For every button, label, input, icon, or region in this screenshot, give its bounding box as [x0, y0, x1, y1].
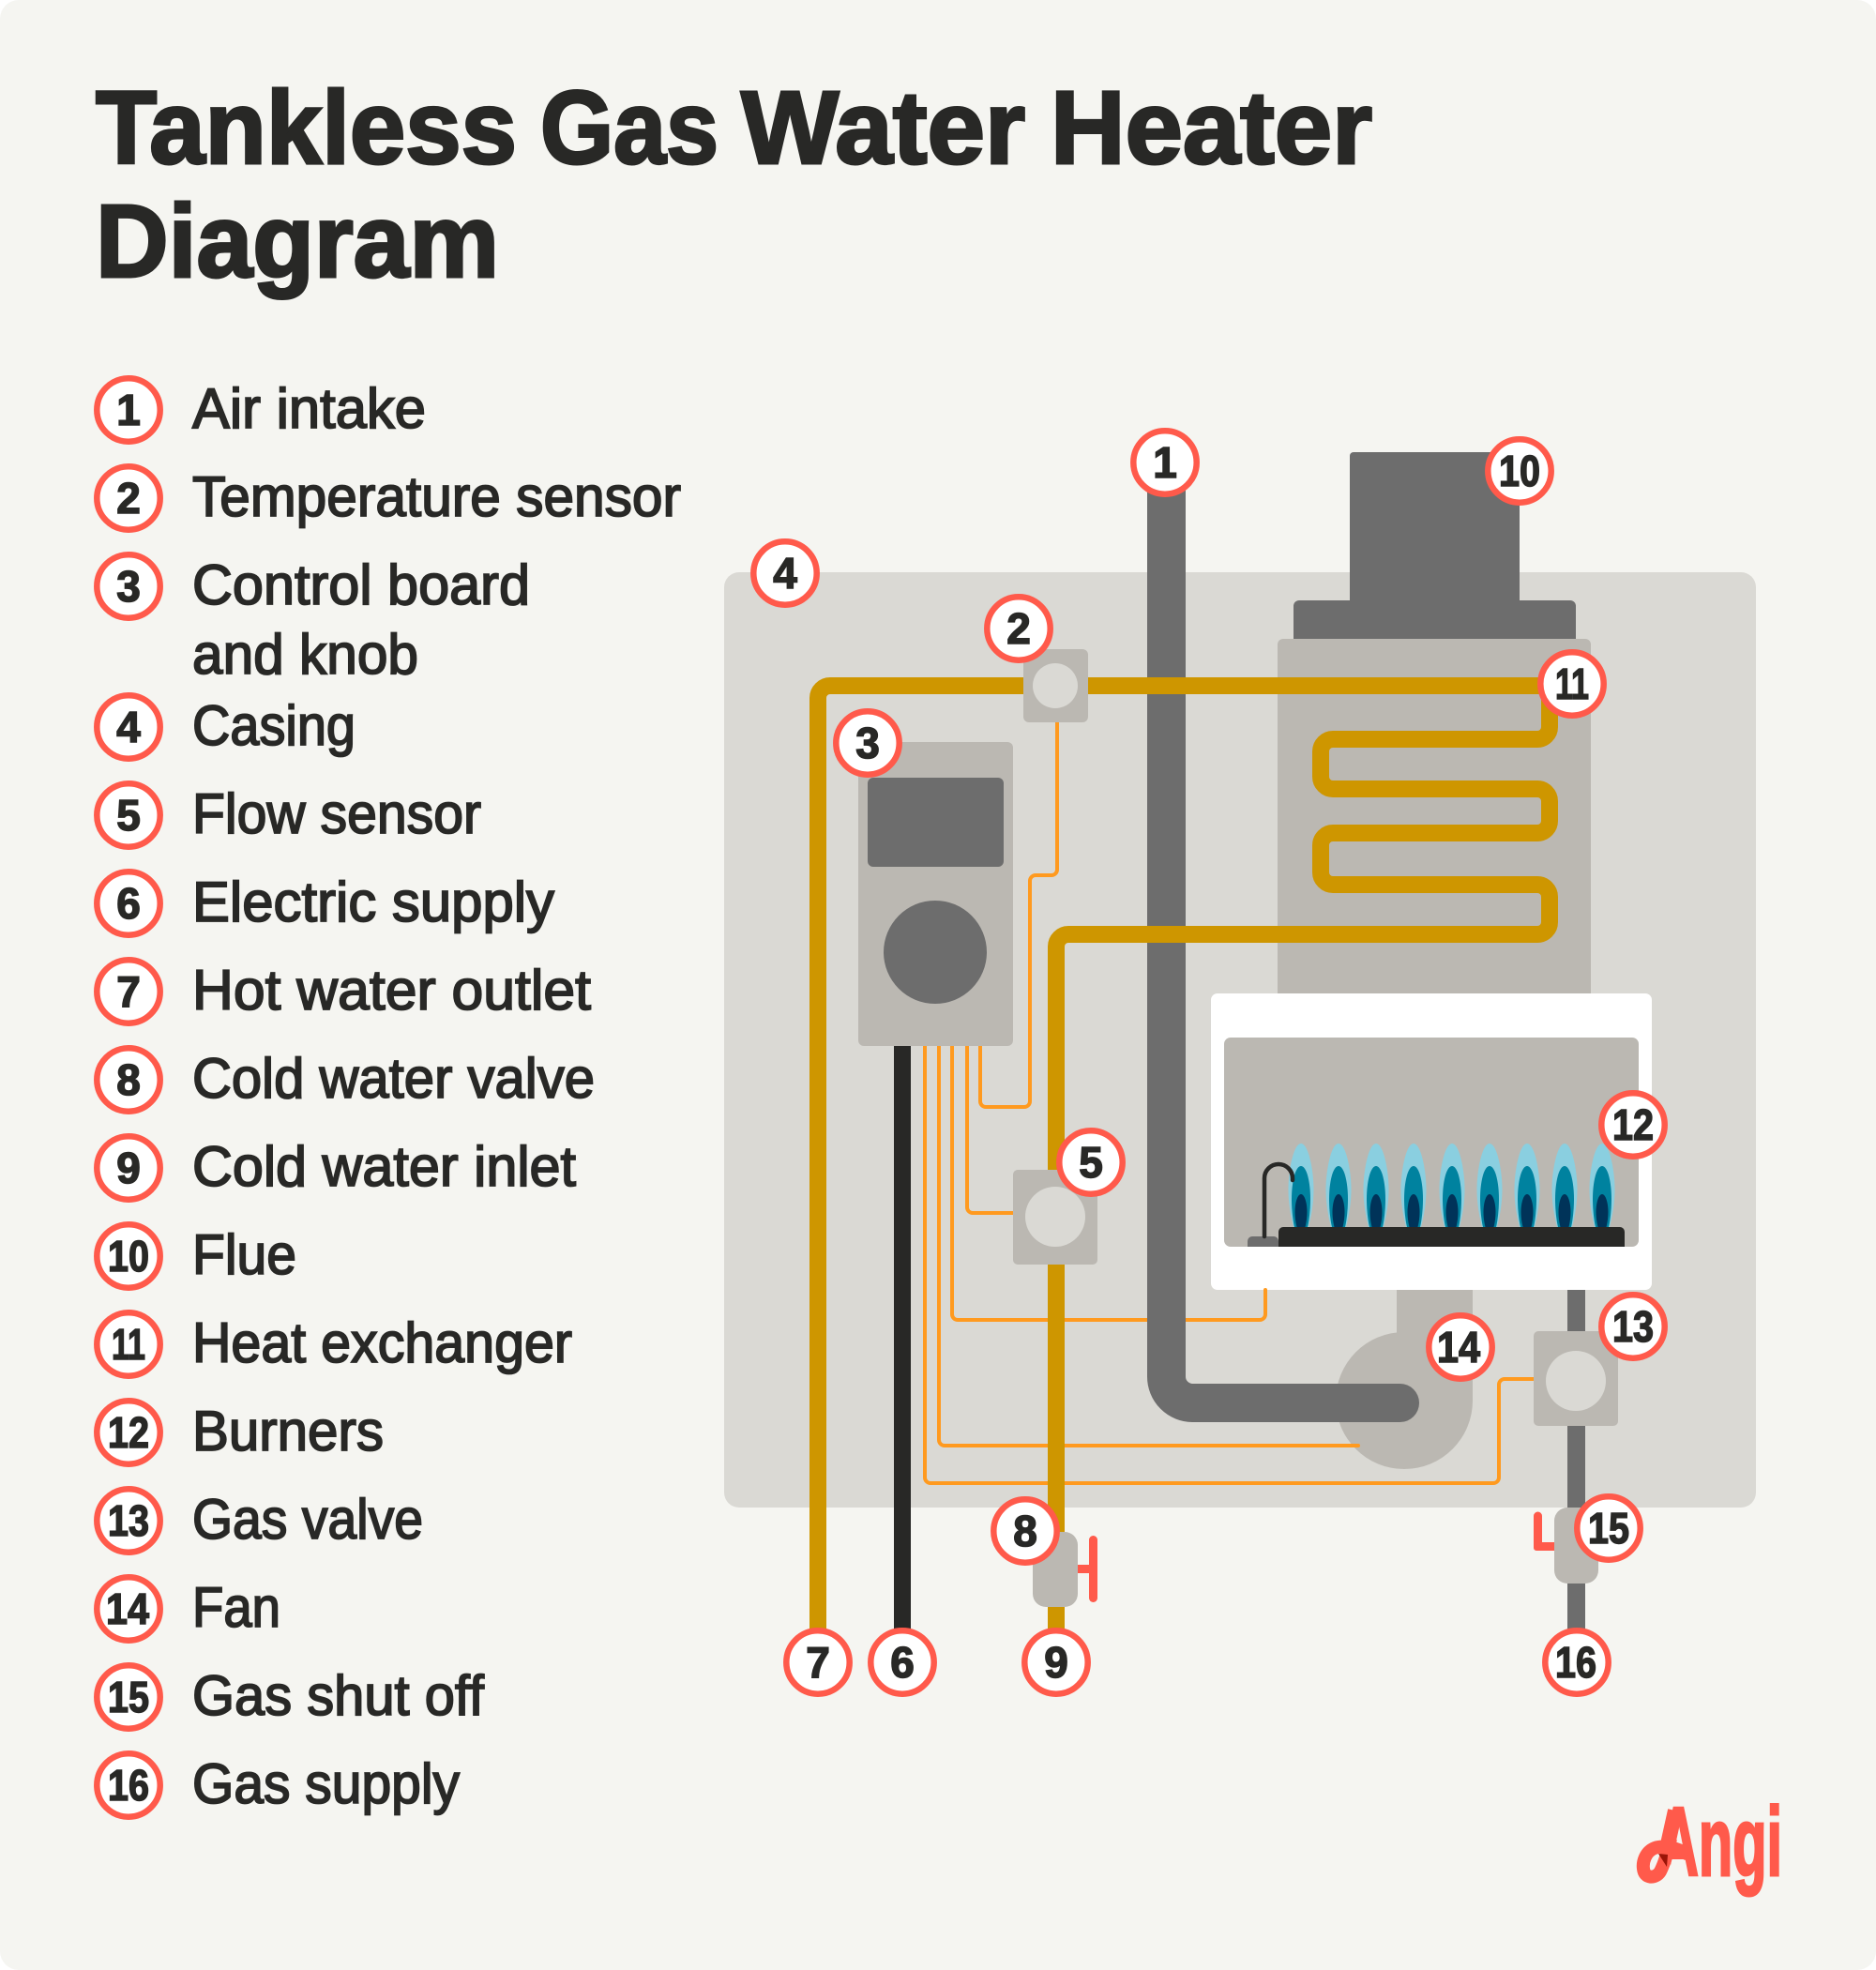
- legend item 16: [97, 1752, 460, 1817]
- marker 3: [836, 711, 900, 775]
- marker 8: 8: [1013, 1507, 1037, 1555]
- marker 1: [1133, 431, 1197, 494]
- legend item 4: Casing: [192, 694, 356, 757]
- electric supply line: [894, 1046, 911, 1662]
- legend item 9: 9: [116, 1144, 141, 1192]
- burner bar: [1278, 1227, 1625, 1247]
- legend item 3: and knob: [192, 623, 418, 686]
- title: Gas: [540, 70, 719, 186]
- legend item 7: Hot water outlet: [192, 959, 591, 1022]
- title: Diagram: [96, 184, 499, 299]
- legend item 9: Cold water inlet: [192, 1135, 576, 1198]
- legend item 10: [97, 1223, 296, 1288]
- heat exchanger body: [1278, 639, 1591, 1005]
- marker 5: 5: [1079, 1138, 1103, 1187]
- legend item 11: Heat exchanger: [192, 1311, 572, 1374]
- legend item 3: 3: [116, 562, 141, 611]
- legend item 8: 8: [116, 1055, 141, 1104]
- cold water valve: [1033, 1532, 1097, 1607]
- legend item 8: Cold water valve: [192, 1047, 595, 1110]
- marker 1: 1: [1153, 438, 1177, 487]
- legend item 3: [97, 553, 530, 686]
- legend item 1: 1: [116, 386, 141, 434]
- marker 7: 7: [806, 1638, 830, 1687]
- legend item 7: 7: [116, 967, 141, 1016]
- gas valve: [1534, 1331, 1618, 1426]
- legend item 12: [97, 1400, 384, 1464]
- legend item 12: 12: [108, 1408, 149, 1457]
- marker 12: [1601, 1093, 1665, 1157]
- legend item 14: [97, 1576, 280, 1641]
- marker 2: [987, 597, 1051, 660]
- marker 12: 12: [1612, 1100, 1654, 1149]
- diagram: [724, 431, 1756, 1694]
- gas supply pipe: [1567, 1290, 1585, 1663]
- marker 11: [1540, 652, 1604, 716]
- marker 14: 14: [1437, 1323, 1480, 1371]
- legend item 13: Gas valve: [192, 1488, 423, 1551]
- control board and knob: [858, 742, 1013, 1046]
- legend item 16: Gas supply: [192, 1752, 460, 1815]
- air intake pipe: [1167, 462, 1399, 1403]
- legend item 15: Gas shut off: [192, 1664, 484, 1727]
- combustion chamber: [1211, 993, 1652, 1290]
- burner flames: [1289, 1144, 1615, 1227]
- marker 15: [1577, 1496, 1641, 1560]
- legend list: [97, 377, 681, 1817]
- gas shut off valve: [1534, 1508, 1598, 1584]
- marker 2: 2: [1006, 604, 1031, 653]
- marker 6: 6: [890, 1638, 915, 1687]
- marker 16: 16: [1555, 1638, 1596, 1687]
- burner compartment: [1224, 1038, 1639, 1247]
- legend item 5: Flow sensor: [192, 782, 481, 845]
- marker 10: [1488, 439, 1551, 503]
- legend item 14: 14: [106, 1584, 149, 1633]
- marker 11: 11: [1555, 659, 1589, 708]
- legend item 13: [97, 1488, 423, 1553]
- title: [96, 70, 1372, 299]
- legend item 5: 5: [116, 791, 141, 840]
- marker 14: [1429, 1315, 1492, 1379]
- marker 8: [993, 1499, 1057, 1563]
- legend item 14: Fan: [192, 1576, 280, 1639]
- marker 3: 3: [855, 719, 880, 767]
- temperature sensor: [1023, 649, 1088, 722]
- legend item 6: Electric supply: [192, 871, 554, 933]
- legend item 1: Air intake: [192, 377, 426, 440]
- title: Tankless: [96, 70, 517, 186]
- fan: [1336, 1285, 1473, 1469]
- marker 13: 13: [1612, 1302, 1654, 1351]
- marker 9: 9: [1044, 1638, 1068, 1687]
- marker 5: [1059, 1130, 1123, 1194]
- legend item 2: Temperature sensor: [192, 465, 681, 528]
- marker 4: [753, 541, 817, 605]
- logo: Angi: [1658, 1788, 1782, 1897]
- legend item 11: 11: [112, 1320, 145, 1369]
- legend item 15: 15: [108, 1673, 149, 1721]
- marker 16: [1545, 1630, 1609, 1694]
- casing: [724, 572, 1756, 1508]
- legend item 4: 4: [116, 703, 141, 751]
- control wires: [925, 722, 1534, 1483]
- legend item 10: Flue: [192, 1223, 296, 1286]
- legend item 2: 2: [116, 474, 141, 523]
- marker 7: [786, 1630, 850, 1694]
- flow sensor: [1013, 1170, 1097, 1265]
- marker 10: 10: [1499, 447, 1540, 495]
- legend item 6: 6: [116, 879, 141, 928]
- marker 6: [870, 1630, 934, 1694]
- legend item 1: [97, 377, 426, 442]
- water pipe and heat exchanger coil: [818, 686, 1550, 1662]
- legend item 13: 13: [108, 1496, 149, 1545]
- marker 4: 4: [773, 549, 797, 598]
- marker 9: [1024, 1630, 1088, 1694]
- marker 13: [1601, 1295, 1665, 1358]
- legend item 4: [97, 694, 356, 759]
- legend item 10: 10: [108, 1232, 149, 1280]
- title: Water: [741, 70, 1025, 186]
- title: Heater: [1051, 70, 1372, 186]
- legend item 16: 16: [108, 1761, 149, 1810]
- flue: [1294, 452, 1576, 647]
- legend item 3: Control board: [192, 553, 530, 616]
- igniter wire: [1264, 1164, 1293, 1236]
- logo: [1643, 1788, 1782, 1897]
- marker 15: 15: [1588, 1504, 1629, 1553]
- legend item 12: Burners: [192, 1400, 384, 1462]
- igniter block: [1248, 1236, 1278, 1247]
